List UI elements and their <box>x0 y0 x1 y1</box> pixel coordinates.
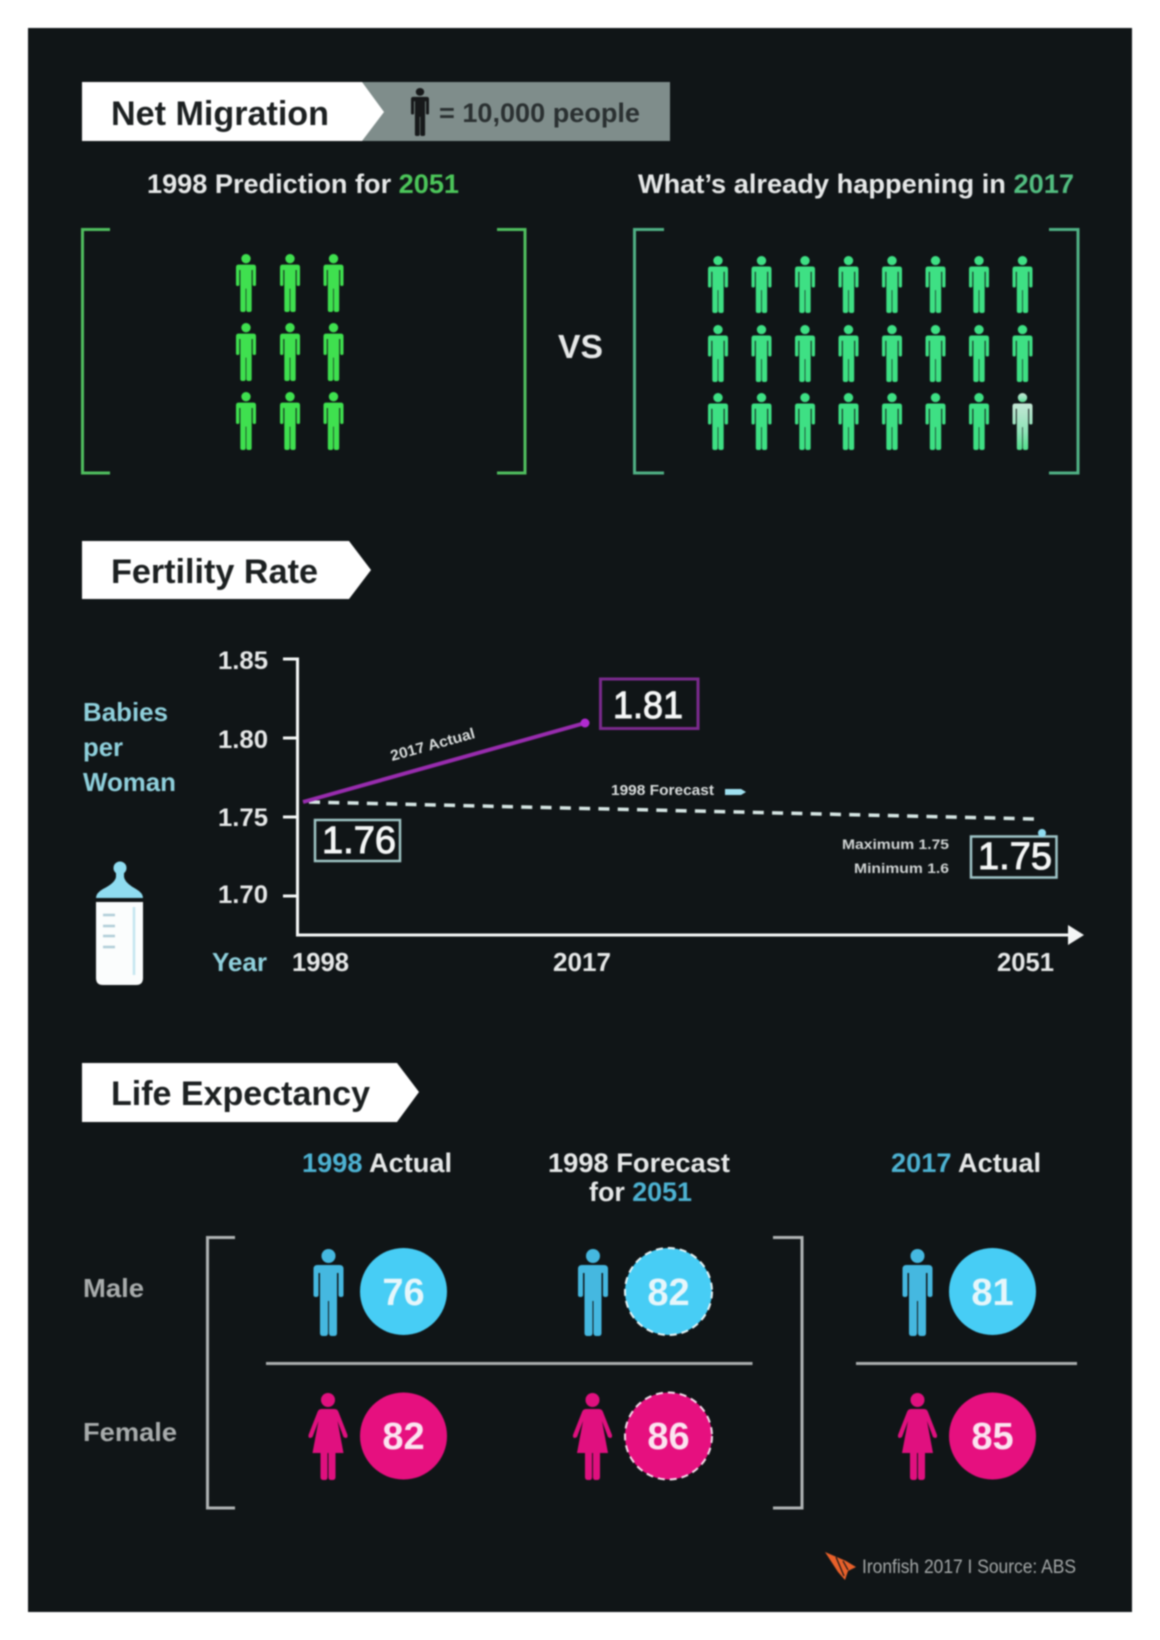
female 1998 actual: 82 <box>382 1416 425 1458</box>
left bracket pair <box>82 230 525 473</box>
y axis tick labels: 1.75 <box>218 804 268 832</box>
purple actual line <box>303 718 590 802</box>
forecast label: 1998 Forecast <box>611 782 714 799</box>
person grid: 2017 actual <box>708 256 1032 450</box>
female 1998 forecast <box>573 1392 712 1480</box>
column heading: 1998 forecast: for 2051 <box>589 1177 692 1207</box>
female 1998 forecast: 86 <box>647 1416 690 1458</box>
male 1998 actual: 76 <box>382 1272 425 1314</box>
value box: 1.75: 1.75 <box>978 836 1052 878</box>
value box: 1.81: 1.81 <box>613 685 683 727</box>
footer: source credit <box>825 1552 1076 1580</box>
forecast range note <box>842 836 949 876</box>
y axis tick labels <box>218 647 268 909</box>
female 2017 actual <box>898 1392 1036 1480</box>
female 2017 actual: 85 <box>971 1416 1014 1458</box>
y axis tick labels: 1.80 <box>218 726 268 754</box>
male 1998 actual <box>314 1248 447 1336</box>
x axis labels: 2051 <box>997 947 1054 977</box>
column heading: 1998 actual: 1998 Actual <box>302 1148 452 1178</box>
heading: fertility rate <box>82 541 371 599</box>
x axis labels: 2017 <box>553 947 611 977</box>
row label: female: Female <box>83 1417 177 1447</box>
source text: Ironfish 2017 I Source: ABS <box>862 1557 1076 1578</box>
column heading: 2017 actual: 2017 Actual <box>891 1148 1041 1178</box>
icon: baby bottle <box>96 862 143 985</box>
row label: male: Male <box>83 1273 144 1303</box>
heading: life expectancy <box>82 1063 419 1122</box>
subheading: already happening: What’s already happening in 2017 <box>638 169 1074 199</box>
panel: net migration <box>82 82 1078 473</box>
right bracket pair <box>634 230 1078 473</box>
forecast range note: Minimum 1.6 <box>854 860 949 876</box>
icon: ironfish logo <box>825 1552 856 1580</box>
panel: fertility rate <box>82 541 1084 985</box>
y axis label: babies per woman: Babies <box>83 697 168 727</box>
heading: net migration: Net Migration <box>111 95 329 133</box>
female 1998 actual <box>308 1392 447 1480</box>
x axis arrowhead <box>1068 925 1084 945</box>
x axis labels: Year <box>212 947 267 977</box>
heading: net migration <box>82 82 384 141</box>
forecast bracket pair <box>208 1238 802 1508</box>
line label: 2017 actual: 2017 Actual <box>389 725 477 765</box>
heading: fertility rate: Fertility Rate <box>111 553 318 591</box>
legend text: = 10,000 people <box>439 98 640 128</box>
y axis tick labels: 1.70 <box>218 881 268 909</box>
y axis label: babies per woman: Woman <box>83 767 176 797</box>
axes <box>283 659 1070 935</box>
row dividers <box>266 1362 1077 1365</box>
dashed forecast line <box>309 802 1036 819</box>
forecast range note: Maximum 1.75 <box>842 836 949 852</box>
x axis labels <box>212 947 1054 977</box>
y axis label: babies per woman: per <box>83 732 123 762</box>
x axis labels: 1998 <box>292 947 349 977</box>
subheading: 1998 prediction: 1998 Prediction for 2051 <box>147 169 459 199</box>
arrow: forecast direction <box>725 789 746 795</box>
male 2017 actual <box>902 1248 1036 1336</box>
value box: 1.76: 1.76 <box>322 820 396 862</box>
panel: life expectancy <box>82 1063 1077 1508</box>
heading: life expectancy: Life Expectancy <box>111 1075 370 1113</box>
vs label: VS <box>558 328 603 365</box>
column heading: 1998 forecast: 1998 Forecast <box>548 1148 730 1178</box>
y axis tick labels: 1.85 <box>218 647 268 675</box>
male 2017 actual: 81 <box>971 1272 1014 1314</box>
male 1998 forecast <box>578 1248 712 1336</box>
icon: legend person <box>411 88 429 136</box>
value box: 1.81 <box>600 679 698 728</box>
legend strip <box>340 82 670 141</box>
line chart: fertility rate <box>212 647 1084 977</box>
male 1998 forecast: 82 <box>647 1272 690 1314</box>
y axis label: babies per woman <box>83 697 176 797</box>
person grid: 2051 prediction <box>236 254 344 450</box>
column heading: 1998 forecast <box>548 1148 730 1207</box>
